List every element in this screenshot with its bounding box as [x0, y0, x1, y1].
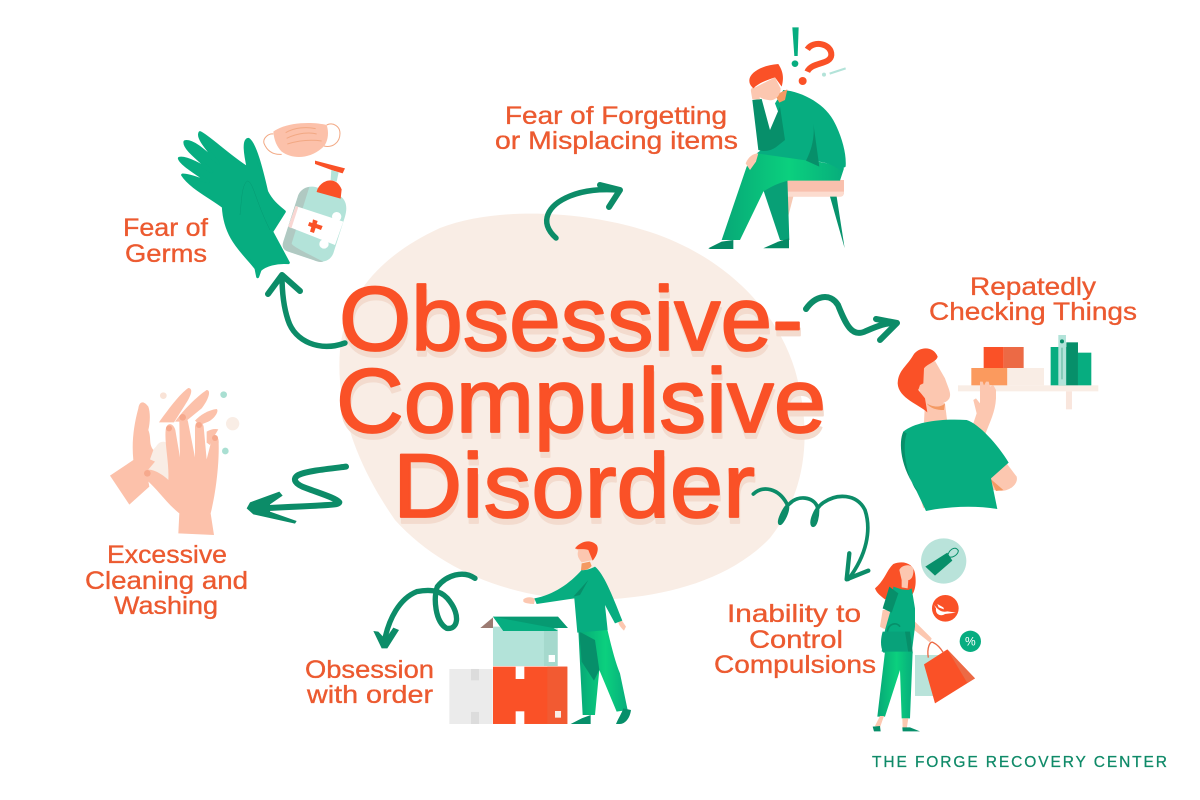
arrow: to obsession with order — [373, 574, 475, 648]
label: fear of forgetting — [495, 102, 738, 155]
label: fear of forgetting: Fear of Forgetting — [505, 102, 727, 130]
label: inability to control: Inability to — [727, 600, 861, 628]
arrow: to excessive cleaning — [247, 467, 346, 524]
label: excessive cleaning — [85, 541, 248, 620]
title: Obsessive- — [340, 275, 804, 376]
icon: shopper with bags: % — [965, 635, 976, 649]
title: Disorder — [393, 436, 755, 537]
title: Disorder — [394, 442, 756, 543]
arrow: to inability to control — [753, 489, 868, 579]
label: excessive cleaning: Washing — [114, 592, 218, 620]
arrow: to fear of germs — [268, 275, 345, 346]
title: Compulsive — [336, 351, 826, 452]
arrow: to checking things — [806, 297, 897, 340]
label: obsession with order: Obsession — [305, 656, 434, 684]
label: inability to control: Compulsions — [714, 651, 876, 679]
label: excessive cleaning: Excessive — [107, 541, 227, 569]
label: repeatedly checking things — [929, 273, 1137, 326]
label: obsession with order: with order — [306, 681, 433, 709]
label: repeatedly checking things: Repatedly — [970, 273, 1097, 301]
label: fear of forgetting: or Misplacing items — [495, 127, 738, 155]
icon: seated worried man — [708, 27, 846, 249]
icon: washing hands — [110, 388, 239, 535]
label: fear of germs: Germs — [125, 240, 207, 268]
title: Compulsive — [337, 357, 827, 458]
label: repeatedly checking things: Checking Things — [929, 298, 1137, 326]
label: obsession with order — [305, 656, 434, 709]
icon: man checking shelf — [898, 335, 1098, 511]
label: fear of germs: Fear of — [123, 214, 208, 242]
label: inability to control: Control — [749, 626, 843, 654]
label: inability to control — [714, 600, 876, 679]
icon: glove, mask and sanitizer — [179, 123, 346, 277]
title — [336, 269, 827, 543]
icon: man stacking boxes — [449, 541, 631, 724]
footer credit: THE FORGE RECOVERY CENTER — [872, 754, 1167, 771]
label: excessive cleaning: Cleaning and — [85, 567, 248, 595]
label: fear of germs — [123, 214, 208, 268]
title: Obsessive- — [339, 269, 803, 370]
arrow: to fear of forgetting — [547, 185, 620, 238]
central peach blob — [339, 214, 805, 600]
icon: shopper with bags — [873, 538, 981, 731]
